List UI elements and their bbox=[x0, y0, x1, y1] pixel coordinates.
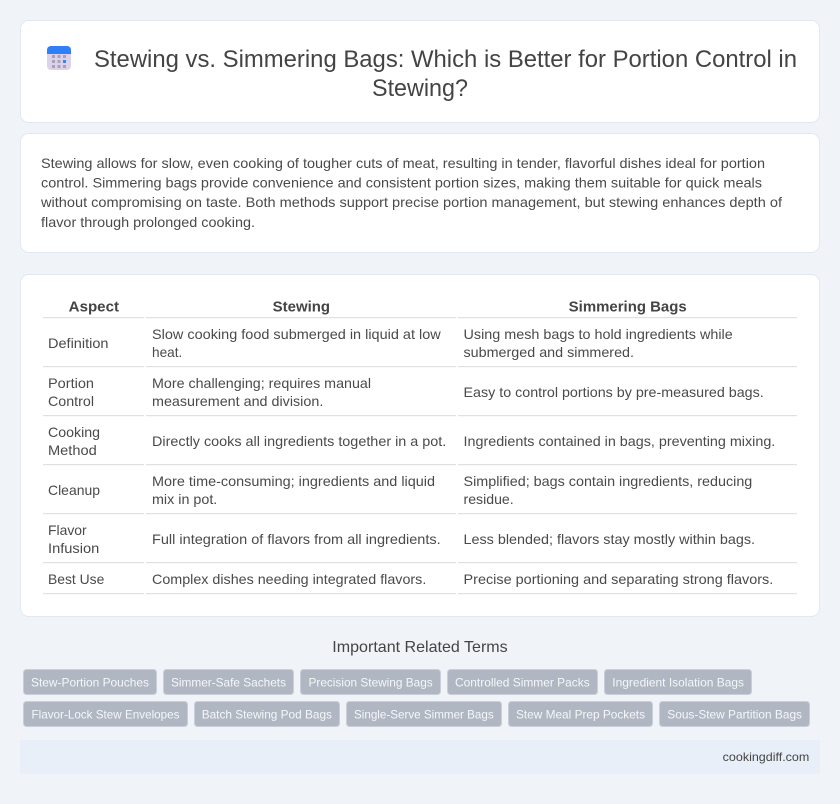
tag bbox=[194, 702, 340, 726]
row: cleanup: Simplified; bags contain ingredients, reducing bbox=[464, 473, 752, 489]
tag bbox=[24, 670, 156, 694]
intro text: Stewing allows for slow, even cooking of tougher cuts of meat, resulting in tender, flavorful dishes ideal for portion bbox=[41, 155, 765, 171]
tag: Flavor-Lock Stew Envelopes bbox=[32, 707, 180, 721]
tag bbox=[346, 702, 502, 726]
table header row: Aspect bbox=[69, 300, 119, 316]
footer: cookingdiff.com bbox=[723, 750, 809, 764]
row: cleanup: Cleanup bbox=[48, 482, 100, 498]
tag bbox=[448, 670, 598, 694]
row: cooking method: Cooking bbox=[48, 424, 100, 440]
row: definition bbox=[43, 326, 797, 367]
panel: header bbox=[20, 20, 820, 122]
tag bbox=[604, 670, 752, 694]
intro text bbox=[40, 155, 782, 230]
row: flavor infusion: Flavor bbox=[48, 522, 87, 538]
tag bbox=[660, 702, 810, 726]
row: best use: Best Use bbox=[48, 571, 104, 587]
tag: Stew Meal Prep Pockets bbox=[516, 707, 645, 721]
row: cooking method bbox=[43, 424, 797, 465]
table header row: Stewing bbox=[273, 300, 330, 316]
intro text: control. Simmering bags provide convenience and consistent portion sizes, making them suitable for quick meals bbox=[41, 175, 762, 191]
row: portion control: Portion bbox=[48, 375, 94, 391]
tag: Single-Serve Simmer Bags bbox=[354, 707, 494, 721]
row: portion control: More challenging; requires manual bbox=[152, 375, 371, 391]
row: cleanup: mix in pot. bbox=[152, 491, 217, 507]
tag list: related terms bbox=[24, 670, 810, 726]
row: best use bbox=[43, 571, 797, 594]
footer bbox=[20, 740, 820, 774]
intro text: without compromising on taste. Both methods support precise portion management, but stewing enhances depth of bbox=[40, 194, 782, 210]
row: best use: Complex dishes needing integrated flavors. bbox=[152, 571, 426, 587]
row: cooking method: Directly cooks all ingredients together in a pot. bbox=[152, 433, 446, 449]
row: portion control: Control bbox=[48, 393, 94, 409]
row: best use: Precise portioning and separating strong flavors. bbox=[464, 571, 773, 587]
row: cleanup bbox=[43, 473, 797, 514]
tag: Batch Stewing Pod Bags bbox=[202, 707, 332, 721]
tag bbox=[508, 702, 652, 726]
tag: Stew-Portion Pouches bbox=[31, 675, 149, 689]
row: cooking method: Method bbox=[48, 442, 97, 458]
title: Stewing vs. Simmering Bags: Which is Better for Portion Control in bbox=[94, 46, 797, 73]
panel: introduction bbox=[20, 134, 820, 252]
row: definition: heat. bbox=[152, 344, 182, 360]
tag: Precision Stewing Bags bbox=[308, 675, 433, 689]
tag bbox=[164, 670, 294, 694]
row: flavor infusion: Infusion bbox=[48, 540, 99, 556]
table header row bbox=[43, 300, 797, 318]
panel: comparison table bbox=[20, 274, 820, 616]
row: definition: submerged and simmered. bbox=[464, 344, 634, 360]
title: Stewing? bbox=[372, 75, 468, 102]
tag: Simmer-Safe Sachets bbox=[171, 675, 286, 689]
row: definition: Definition bbox=[48, 335, 108, 351]
heading: related terms: Important Related Terms bbox=[332, 639, 508, 656]
row: portion control: measurement and division. bbox=[152, 393, 323, 409]
tag: Ingredient Isolation Bags bbox=[612, 675, 744, 689]
row: portion control bbox=[43, 375, 797, 416]
intro text: flavor through prolonged cooking. bbox=[41, 214, 255, 230]
row: cleanup: residue. bbox=[464, 491, 514, 507]
row: definition: Slow cooking food submerged in liquid at low bbox=[152, 326, 442, 342]
row: definition: Using mesh bags to hold ingredients while bbox=[464, 326, 733, 342]
row: portion control: Easy to control portions by pre-measured bags. bbox=[464, 384, 764, 400]
tag bbox=[300, 670, 440, 694]
tag: Sous-Stew Partition Bags bbox=[667, 707, 802, 721]
table header row: Simmering Bags bbox=[569, 300, 687, 316]
row: cooking method: Ingredients contained in bags, preventing mixing. bbox=[464, 433, 775, 449]
icon: calendar bbox=[47, 46, 71, 70]
tag bbox=[24, 702, 188, 726]
tag: Controlled Simmer Packs bbox=[455, 675, 590, 689]
row: flavor infusion: Full integration of flavors from all ingredients. bbox=[152, 531, 441, 547]
row: flavor infusion: Less blended; flavors stay mostly within bags. bbox=[464, 531, 755, 547]
row: flavor infusion bbox=[43, 522, 797, 563]
row: cleanup: More time-consuming; ingredients and liquid bbox=[152, 473, 435, 489]
title bbox=[94, 46, 797, 102]
